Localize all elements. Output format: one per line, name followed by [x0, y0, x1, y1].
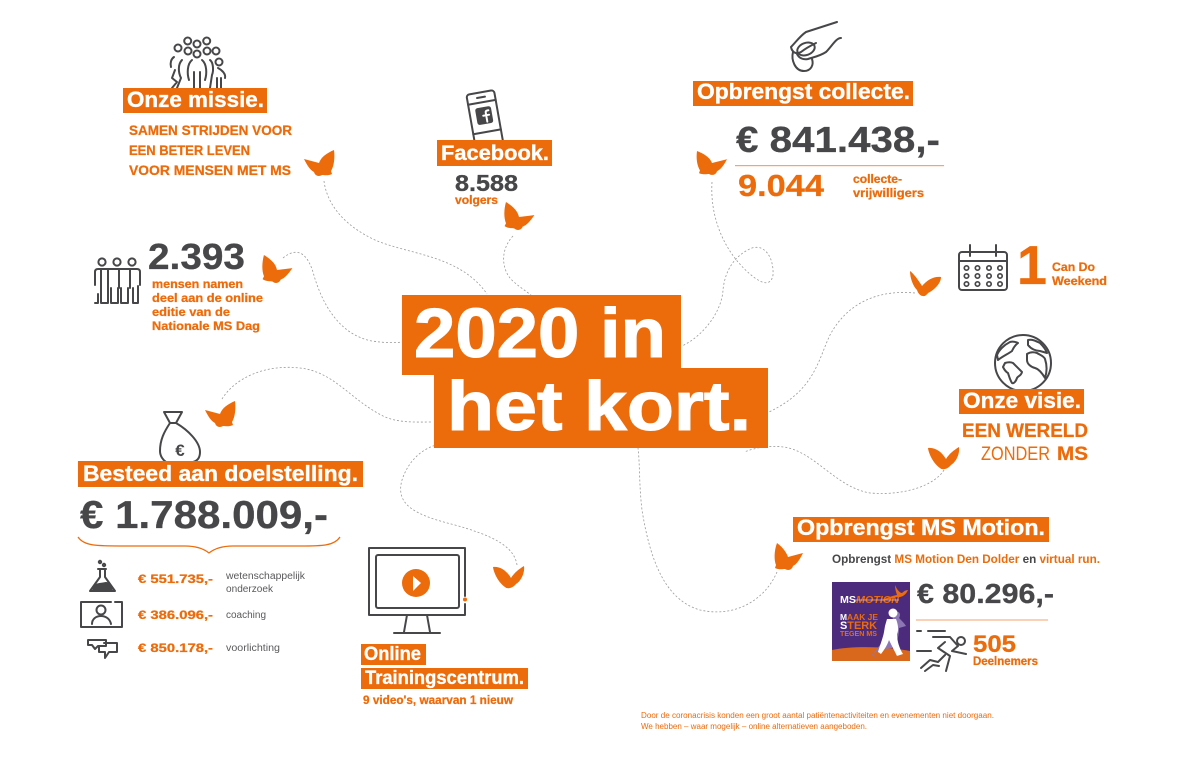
footnote: We hebben – waar mogelijk – online alternatieven aangeboden.	[641, 722, 867, 731]
panel: online trainingscentrum	[361, 548, 528, 707]
icon: speech bubbles	[88, 640, 117, 658]
mission text: EEN BETER LEVEN	[129, 143, 250, 158]
panel: opbrengst collecte	[693, 22, 944, 203]
icon: butterfly	[697, 151, 727, 175]
followers label: volgers	[455, 195, 498, 207]
icon: money bag	[160, 412, 200, 462]
panel: besteed aan doelstelling	[78, 401, 363, 658]
participants label: Deelnemers	[973, 656, 1038, 668]
title: 2020 in	[414, 294, 666, 372]
description: Nationale MS Dag	[152, 321, 260, 333]
panel: opbrengst MS motion	[775, 515, 1100, 671]
icon: video coach	[81, 602, 122, 627]
amount: € 1.788.009,-	[80, 494, 328, 537]
description: editie van de	[152, 307, 230, 319]
volunteers number: 9.044	[738, 168, 825, 203]
label	[1052, 260, 1107, 288]
icon: monitor	[369, 548, 467, 633]
panel: national MS day	[95, 236, 294, 333]
label: onderzoek	[226, 584, 274, 595]
icon: butterfly	[493, 566, 524, 588]
poster: MS Motion: STERK	[840, 620, 877, 632]
subtitle: 9 video's, waarvan 1 nieuw	[363, 695, 513, 707]
poster: MS Motion: MS	[840, 595, 856, 606]
vision text: ZONDER	[981, 444, 1050, 465]
panel: can do weekend	[910, 234, 1107, 296]
amount: € 80.296,-	[917, 578, 1054, 609]
row: research	[90, 561, 306, 595]
panel: facebook	[437, 90, 552, 232]
icon: phone	[466, 90, 504, 150]
icon: calendar	[959, 245, 1007, 290]
description: deel aan de online	[152, 293, 263, 305]
vision text: MS	[1057, 444, 1088, 465]
vision text: EEN WERELD	[962, 421, 1088, 442]
amount: € 386.096,-	[138, 608, 213, 622]
icon: butterfly	[205, 401, 235, 427]
poster: MS Motion: MOTION	[856, 595, 900, 606]
label: Weekend	[1052, 274, 1107, 288]
heading: Onze missie.	[127, 87, 264, 112]
title	[402, 294, 768, 448]
icon: butterfly	[775, 543, 803, 570]
row: coaching	[81, 602, 266, 627]
icon: flask	[90, 561, 115, 591]
label	[225, 571, 306, 595]
row: education	[88, 640, 280, 658]
followers number: 8.588	[455, 170, 518, 196]
amount: € 551.735,-	[138, 572, 213, 586]
panel: onze missie	[123, 38, 334, 178]
icon: globe	[995, 335, 1051, 391]
footnote	[641, 711, 994, 731]
icon: runner	[917, 631, 966, 671]
heading	[361, 644, 528, 689]
icon: butterfly	[910, 271, 941, 296]
big number: 1	[1017, 234, 1047, 296]
icon: butterfly	[260, 255, 294, 285]
heading: Trainingscentrum.	[365, 668, 524, 689]
mission text	[129, 123, 292, 178]
volunteers label	[853, 174, 924, 200]
label: Can Do	[1052, 260, 1095, 274]
icon: butterfly	[502, 202, 536, 232]
poster: MS Motion: MAAK JE	[840, 612, 878, 622]
subtitle: Opbrengst MS Motion Den Dolder en virtual run.	[832, 554, 1100, 566]
footnote: Door de coronacrisis konden een groot aantal patiëntenactiviteiten en evenementen niet doorgaan.	[641, 711, 994, 720]
heading: Online	[364, 644, 421, 665]
amount: € 850.178,-	[138, 641, 213, 655]
poster: MS Motion	[832, 582, 910, 661]
heading: Facebook.	[441, 142, 549, 165]
heading: Besteed aan doelstelling.	[83, 461, 358, 486]
heading: Opbrengst collecte.	[697, 79, 910, 104]
volunteers label: collecte-	[853, 174, 902, 186]
mission text: VOOR MENSEN MET MS	[129, 163, 291, 178]
icon: three people	[95, 258, 140, 303]
icon: money bag: €	[175, 441, 185, 460]
title: het kort.	[447, 367, 751, 445]
panel: onze visie	[928, 335, 1088, 469]
participants number: 505	[973, 631, 1016, 658]
vision text	[962, 421, 1088, 465]
description	[152, 279, 263, 333]
poster: MS Motion: TEGEN MS	[840, 631, 877, 638]
heading: Opbrengst MS Motion.	[797, 515, 1045, 540]
label: coaching	[226, 610, 266, 621]
label: wetenschappelijk	[225, 571, 306, 582]
icon: butterfly	[304, 150, 334, 176]
heading: Onze visie.	[963, 388, 1081, 413]
icon: butterfly	[928, 447, 959, 469]
amount: € 841.438,-	[736, 119, 940, 160]
brace	[78, 537, 340, 553]
label: voorlichting	[226, 643, 280, 654]
description: mensen namen	[152, 279, 243, 291]
icon: group of people	[171, 38, 225, 88]
mission text: SAMEN STRIJDEN VOOR	[129, 123, 292, 138]
icon: hand with coin	[791, 22, 841, 71]
big number: 2.393	[148, 236, 245, 277]
volunteers label: vrijwilligers	[853, 188, 924, 200]
